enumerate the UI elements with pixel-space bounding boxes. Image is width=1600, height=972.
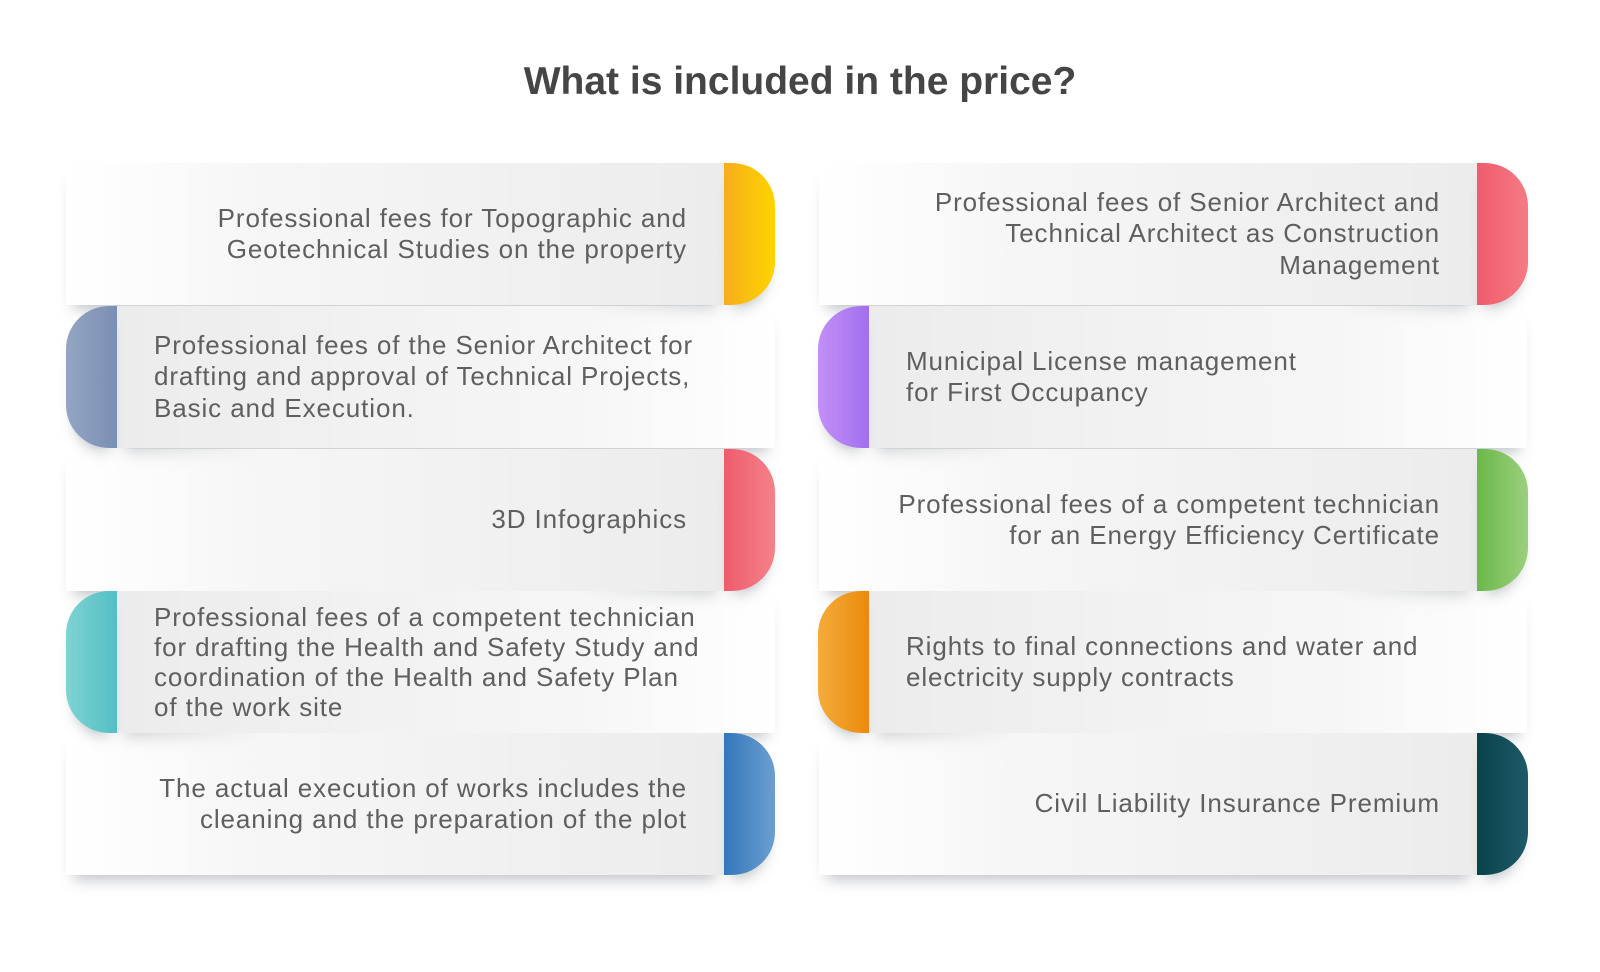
cap: red	[724, 449, 775, 591]
card: technical projects	[66, 306, 776, 460]
text: energy	[898, 488, 1440, 550]
text: technical projects	[154, 330, 693, 423]
card: connections	[818, 591, 1528, 744]
card: execution of works	[66, 733, 775, 888]
cap: blue	[724, 733, 775, 875]
text: technical projects: drafting and approval of Technical Projects,	[154, 361, 690, 391]
text: connections	[906, 630, 1418, 692]
text: health and safety: coordination of the Health and Safety Plan	[154, 662, 679, 692]
cap: red	[1477, 163, 1528, 305]
card: topographic studies	[66, 163, 775, 316]
text: health and safety: of the work site	[154, 692, 343, 722]
text: technical projects: Basic and Execution.	[154, 393, 415, 423]
text: technical projects: Professional fees of the Senior Architect for	[154, 330, 693, 360]
text: topographic: Professional fees for Topographic and	[218, 202, 687, 232]
cap: green	[1477, 449, 1528, 591]
cap: blue-grey	[66, 306, 117, 448]
cap: dark teal	[1477, 733, 1528, 875]
text: health and safety: for drafting the Health and Safety Study and	[154, 632, 699, 662]
cap: purple	[818, 306, 869, 448]
text: execution	[159, 772, 687, 834]
text: 3D: 3D Infographics	[491, 504, 687, 534]
card: health and safety	[66, 591, 776, 744]
text: insurance: Civil Liability Insurance Premium	[1035, 788, 1440, 818]
card: energy efficiency	[818, 449, 1528, 602]
card: municipal license	[818, 306, 1528, 460]
text: connections: Rights to final connections and water and	[906, 630, 1418, 660]
text: topographic: Geotechnical Studies on the property	[227, 234, 687, 264]
text: health and safety	[154, 602, 699, 722]
text: execution: cleaning and the preparation of the plot	[200, 804, 687, 834]
text: construction management: Technical Architect as Construction	[1005, 218, 1440, 248]
text: construction management: Management	[1279, 250, 1440, 280]
text: municipal license	[906, 346, 1297, 407]
text: construction management	[935, 187, 1440, 280]
text: energy: for an Energy Efficiency Certificate	[1009, 520, 1440, 550]
card: 3D infographics	[66, 449, 775, 602]
card: insurance	[818, 733, 1528, 888]
text: construction management: Professional fees of Senior Architect and	[935, 187, 1440, 217]
text: connections: electricity supply contracts	[906, 662, 1235, 692]
text: health and safety: Professional fees of a competent technician	[154, 602, 696, 632]
text: execution: The actual execution of works includes the	[159, 772, 687, 802]
cap: orange	[818, 591, 869, 733]
text: energy: Professional fees of a competent technician	[898, 488, 1440, 518]
text: municipal license: for First Occupancy	[906, 377, 1148, 407]
cap: yellow	[724, 163, 775, 305]
text: topographic	[218, 202, 687, 264]
text: municipal license: Municipal License management	[906, 346, 1297, 376]
cap: teal	[66, 591, 117, 733]
title: What is included in the price?	[524, 60, 1076, 103]
card: senior architect construction management	[818, 163, 1528, 316]
